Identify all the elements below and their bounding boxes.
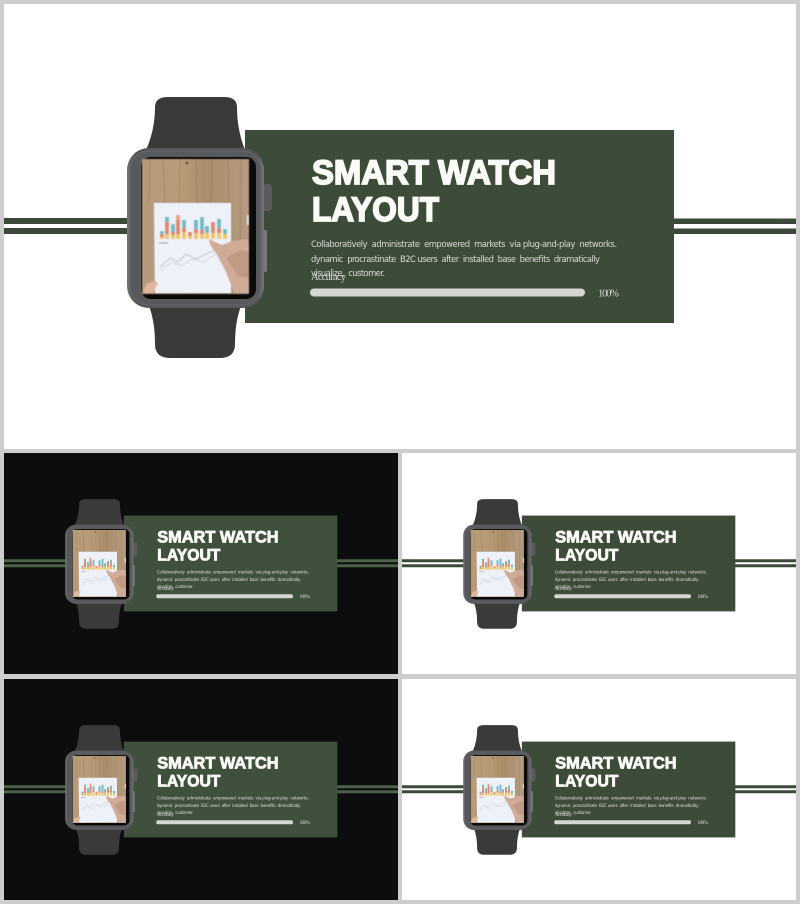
title: SMART WATCH: [312, 154, 556, 192]
progress bar: [156, 594, 293, 598]
stripes: [4, 785, 398, 793]
body text: dynamic procrastinate B2C users after installed base benefits dramatically: [311, 254, 600, 264]
icon: smart watch: [127, 97, 272, 358]
title: SMART WATCH: [555, 753, 677, 772]
icon: smart watch: [463, 499, 535, 629]
stripes: [4, 559, 398, 567]
body text: visualize, customer.: [157, 584, 194, 589]
title: SMART WATCH: [157, 527, 279, 546]
main slide: white: [4, 4, 796, 449]
title: LAYOUT: [157, 546, 221, 565]
body text: Collaboratively administrate empowered markets via plug-and-play networks.: [555, 796, 707, 801]
progress label: Accuracy: [311, 272, 347, 283]
progress value: 100%: [698, 594, 709, 600]
progress bar: [554, 820, 691, 824]
body text: dynamic procrastinate B2C users after installed base benefits dramatically: [157, 803, 301, 808]
panel: [522, 742, 735, 837]
slide: black bottom left: [4, 679, 398, 900]
slide: white top right: [402, 453, 796, 674]
body text: dynamic procrastinate B2C users after installed base benefits dramatically: [555, 803, 699, 808]
title: LAYOUT: [555, 546, 619, 565]
progress bar: [156, 820, 293, 824]
panel: [522, 516, 735, 611]
slide: black top left: [4, 453, 398, 674]
left stripes: [4, 218, 132, 234]
body text: visualize, customer.: [311, 268, 385, 278]
progress bar: [554, 594, 691, 598]
body text: visualize, customer.: [555, 584, 592, 589]
progress value: 100%: [300, 594, 311, 600]
right stripes: [670, 218, 796, 234]
title: LAYOUT: [157, 772, 221, 791]
icon: smart watch: [65, 499, 137, 629]
body text: Collaboratively administrate empowered markets via plug-and-play networks.: [555, 570, 707, 575]
slide: white bottom right: [402, 679, 796, 900]
stripes: [402, 559, 796, 567]
progress bar: [310, 288, 585, 296]
title: SMART WATCH: [555, 527, 677, 546]
progress value: 100%: [300, 820, 311, 826]
body text: dynamic procrastinate B2C users after installed base benefits dramatically: [157, 577, 301, 582]
title: LAYOUT: [555, 772, 619, 791]
body text: Collaboratively administrate empowered markets via plug-and-play networks.: [311, 239, 617, 249]
progress label: Accuracy: [555, 586, 573, 592]
panel: [124, 516, 337, 611]
progress label: Accuracy: [157, 586, 175, 592]
body text: dynamic procrastinate B2C users after installed base benefits dramatically: [555, 577, 699, 582]
body text: visualize, customer.: [157, 810, 194, 815]
body text: visualize, customer.: [555, 810, 592, 815]
progress label: Accuracy: [157, 812, 175, 818]
stripes: [402, 785, 796, 793]
body text: Collaboratively administrate empowered markets via plug-and-play networks.: [157, 570, 309, 575]
panel: green content box: [245, 130, 674, 323]
title: SMART WATCH: [157, 753, 279, 772]
body text: Collaboratively administrate empowered markets via plug-and-play networks.: [157, 796, 309, 801]
panel: [124, 742, 337, 837]
icon: smart watch: [65, 725, 137, 855]
title: LAYOUT: [312, 191, 439, 229]
progress value: 100%: [698, 820, 709, 826]
progress label: Accuracy: [555, 812, 573, 818]
icon: smart watch: [463, 725, 535, 855]
progress value: 100%: [598, 288, 619, 300]
